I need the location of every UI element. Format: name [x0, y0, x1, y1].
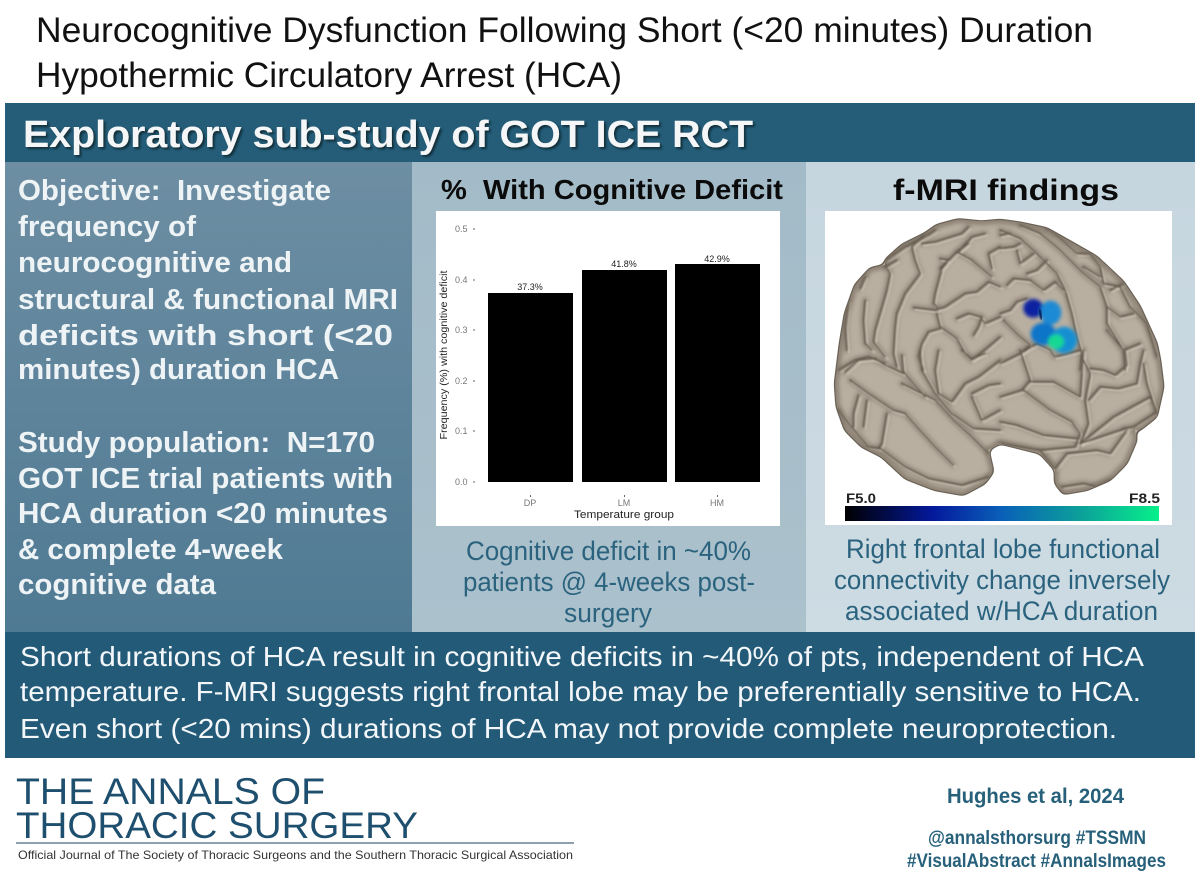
header banner: Exploratory sub-study of GOT ICE RCT: [23, 114, 753, 156]
study population text: HCA duration <20 minutes: [18, 498, 388, 530]
study population text: Study population: N=170: [18, 427, 375, 459]
journal logo: THE ANNALS OF: [16, 771, 325, 812]
objective text: minutes) duration HCA: [18, 354, 339, 386]
study population text: cognitive data: [18, 569, 217, 601]
panel heading: f-MRI findings: [893, 174, 1119, 207]
conclusion banner: temperature. F-MRI suggests right frontal lobe may be preferentially sensitive to HCA.: [20, 676, 1141, 707]
y axis: 0.1: [455, 426, 468, 436]
conclusion banner: Short durations of HCA result in cognitive deficits in ~40% of pts, independent of HCA: [20, 641, 1144, 672]
panel: objective and study population: [5, 162, 412, 632]
panel heading: % With Cognitive Deficit: [441, 174, 783, 205]
journal logo: THORACIC SURGERY: [16, 805, 418, 846]
title: Hypothermic Circulatory Arrest (HCA): [36, 56, 622, 95]
caption: f-MRI: [834, 534, 1170, 626]
bars: [488, 264, 760, 482]
study population text: GOT ICE trial patients with: [18, 463, 393, 495]
caption: f-MRI: associated w/HCA duration: [845, 596, 1158, 626]
objective text: [18, 175, 398, 386]
y axis: 0.3: [455, 325, 468, 335]
x axis: Temperature group: [574, 509, 674, 521]
x axis: HM: [710, 498, 724, 508]
caption: cognitive deficit: patients @ 4-weeks post-: [463, 567, 755, 597]
bar value labels: 41.8%: [611, 259, 637, 269]
journal logo: [16, 771, 574, 862]
caption: f-MRI: Right frontal lobe functional: [846, 534, 1160, 564]
panel: f-MRI findings: [806, 162, 1195, 632]
colour scale: F8.5: [1129, 490, 1160, 506]
bar chart: [436, 211, 780, 526]
panel: cognitive deficit: [412, 162, 806, 632]
x axis: LM: [618, 498, 630, 508]
y axis: Frequency (%) with cognitive deficit: [438, 270, 450, 440]
caption: cognitive deficit: Cognitive deficit in ~40%: [466, 536, 751, 566]
citation and social tags: #VisualAbstract #AnnalsImages: [907, 851, 1166, 872]
citation and social tags: [907, 785, 1166, 872]
caption: cognitive deficit: surgery: [564, 598, 652, 628]
activation cluster: [1023, 299, 1077, 353]
objective text: structural & functional MRI: [18, 284, 398, 316]
y axis: 0.2: [455, 376, 468, 386]
objective text: Objective: Investigate: [18, 175, 331, 207]
header banner: [5, 103, 1195, 162]
bar value labels: 37.3%: [517, 282, 543, 292]
bar value labels: 42.9%: [704, 254, 730, 264]
conclusion banner: Even short (<20 mins) durations of HCA may not provide complete neuroprotection.: [20, 713, 1117, 744]
journal logo: Official Journal of The Society of Thoracic Surgeons and the Southern Thoracic Surgical Association: [18, 848, 573, 862]
y axis: [438, 224, 475, 487]
citation and social tags: Hughes et al, 2024: [947, 785, 1124, 808]
brain figure: [825, 211, 1172, 525]
caption: cognitive deficit: [463, 536, 755, 628]
citation and social tags: @annalsthorsurg #TSSMN: [928, 828, 1146, 849]
caption: f-MRI: connectivity change inversely: [834, 565, 1170, 595]
study population text: [18, 427, 393, 601]
objective text: deficits with short (<20: [18, 320, 393, 352]
y axis: 0.5: [455, 224, 468, 234]
colour scale: [845, 490, 1160, 521]
title: [36, 11, 1093, 95]
study population text: & complete 4-week: [18, 534, 284, 566]
colour scale: F5.0: [846, 490, 876, 506]
y axis: 0.4: [455, 275, 468, 285]
icon: brain render: [835, 219, 1163, 495]
title: Neurocognitive Dysfunction Following Short (<20 minutes) Duration: [36, 11, 1093, 50]
y axis: 0.0: [455, 477, 468, 487]
x axis: [524, 495, 724, 521]
objective text: frequency of: [18, 211, 196, 243]
x axis: DP: [524, 498, 536, 508]
bar value labels: [517, 254, 730, 292]
objective text: neurocognitive and: [18, 247, 292, 279]
conclusion banner: [5, 632, 1195, 758]
